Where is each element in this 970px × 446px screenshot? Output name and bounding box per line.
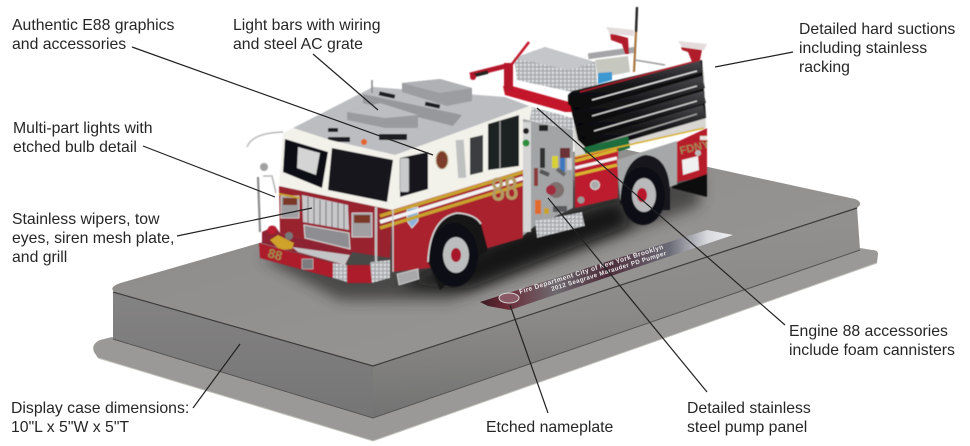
mirror (400, 158, 409, 192)
front wheel arch (428, 213, 488, 290)
label: light bars: and steel AC grate (233, 36, 363, 53)
diamond plate compartment box (514, 47, 598, 92)
leader line: multi-part lights (143, 146, 275, 197)
blue box (598, 72, 612, 84)
emblem (436, 151, 448, 169)
nameplate (480, 230, 733, 310)
base flange (93, 248, 878, 441)
side windows (400, 115, 519, 197)
display case base (93, 144, 878, 441)
base left side (113, 292, 373, 418)
cab stripes (376, 172, 523, 272)
rear racks and antenna (588, 7, 707, 78)
FDNY badge (407, 207, 418, 228)
label: hard suctions: Detailed hard suctions (799, 21, 955, 38)
rear red panel (677, 128, 711, 182)
side step (397, 269, 419, 285)
headlights (281, 196, 372, 237)
rear mud flap (672, 174, 707, 197)
front wheel (430, 223, 478, 287)
front bumper (259, 243, 390, 283)
leader line: pump panel (548, 198, 707, 392)
truck shadow (262, 175, 700, 300)
label: graphics: and accessories (12, 36, 126, 53)
pump panel (522, 107, 585, 238)
hard suction hoses (568, 60, 706, 152)
label: multi-part lights: etched bulb detail (13, 139, 137, 156)
label: nameplate: Etched nameplate (486, 419, 614, 436)
red deck gun and support bar (470, 42, 578, 112)
cab white upper (279, 105, 532, 212)
label: pump panel: steel pump panel (687, 419, 807, 436)
front hose bed (262, 226, 352, 266)
label: hard suctions: including stainless (799, 40, 927, 57)
label: display case: 10"L x 5"W x 5"T (11, 419, 129, 436)
leader line: hard suctions (715, 52, 793, 67)
windshield (283, 139, 328, 188)
rear silver body (617, 141, 677, 200)
label: wipers: Stainless wipers, tow (12, 211, 160, 228)
rear red panel: FDNY (679, 138, 711, 157)
cab side lower red (392, 170, 523, 272)
leader line: wipers (177, 208, 312, 236)
nameplate: 2012 Seagrave Marauder PD Pumper (550, 250, 668, 293)
label: light bars: Light bars with wiring (233, 17, 381, 34)
label: accessories: include foam cannisters (789, 342, 955, 359)
base right side (373, 207, 860, 418)
front pole and tow hook (247, 132, 283, 232)
nameplate: Fire Department City of New York Brooklyn (518, 244, 665, 296)
roof (293, 87, 532, 155)
yellow front stripes (279, 194, 300, 198)
front grille (302, 195, 350, 249)
leader line: graphics (132, 47, 433, 155)
fire engine model (247, 7, 711, 290)
leader line: light bars (313, 54, 378, 110)
front bumper: 88 (266, 245, 284, 264)
label: pump panel: Detailed stainless (687, 400, 811, 417)
label: wipers: eyes, siren mesh plate, (12, 230, 174, 247)
leader line: accessories (537, 108, 785, 325)
label: accessories: Engine 88 accessories (789, 323, 948, 340)
number 88 on cab: 88 (490, 169, 519, 208)
label: hard suctions: racking (799, 59, 850, 76)
leader line: nameplate (510, 305, 548, 413)
cab front red (279, 186, 392, 258)
label: graphics: Authentic E88 graphics (12, 17, 174, 34)
label: wipers: and grill (12, 249, 67, 266)
label: display case: Display case dimensions: (11, 400, 189, 417)
label: multi-part lights: Multi-part lights with (13, 120, 153, 137)
rear upper body (573, 72, 706, 158)
base top surface (112, 144, 860, 366)
rear red compartment (575, 148, 618, 208)
rear wheel (620, 155, 670, 225)
light bar and AC grate (328, 79, 472, 145)
leader line: display case (193, 344, 240, 408)
green compartment (582, 136, 630, 160)
arch trim (428, 213, 481, 262)
